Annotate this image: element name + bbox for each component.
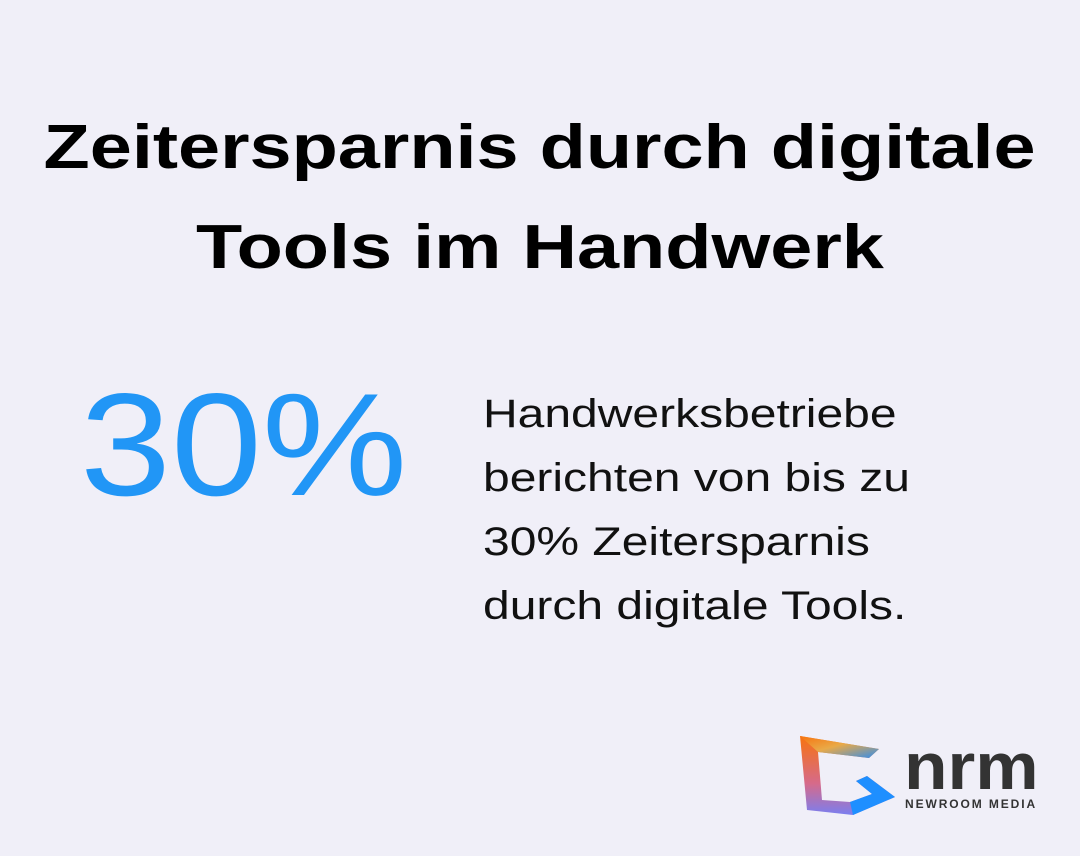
logo: nrm newroom media: NEWROOM MEDIA — [905, 797, 1037, 811]
description text: berichten von bis zu — [483, 456, 910, 500]
title: Zeitersparnis durch digitale — [44, 113, 1036, 182]
title: Tools im Handwerk — [196, 213, 884, 282]
icon: logo mark — [800, 736, 895, 815]
description text: durch digitale Tools. — [483, 584, 906, 628]
description text: 30% Zeitersparnis — [483, 520, 870, 564]
description text: Handwerksbetriebe — [483, 392, 897, 436]
big stat: 30%: 30% — [80, 363, 407, 526]
title — [44, 113, 1036, 282]
description text — [483, 392, 910, 628]
logo: nrm newroom media — [800, 734, 1039, 815]
